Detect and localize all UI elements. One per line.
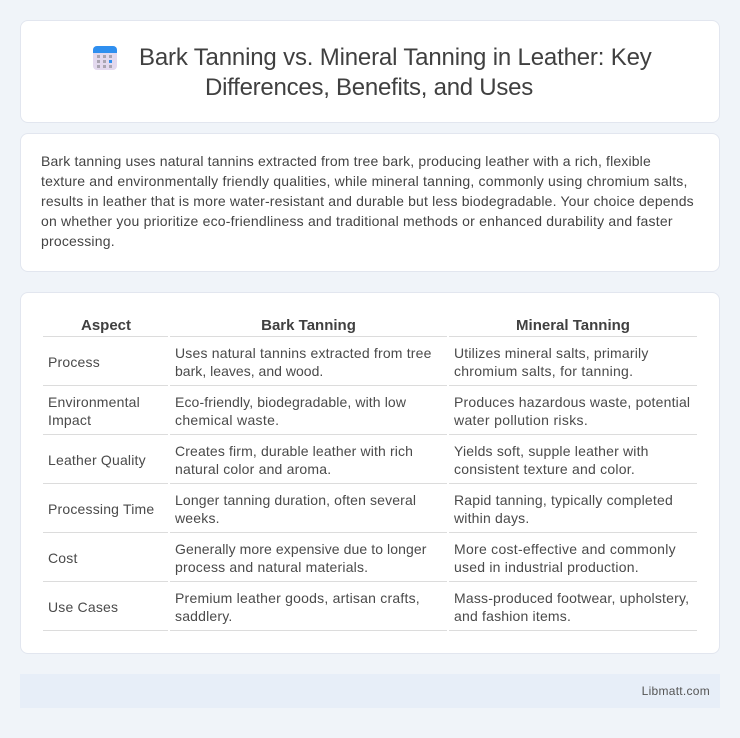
text block: intro paragraph: texture and environmentally friendly qualities, while mineral tanning, commonly using chromium salts,	[41, 173, 688, 189]
panel: intro card	[20, 133, 720, 272]
heading: title: Bark Tanning vs. Mineral Tanning in Leather: Key	[139, 44, 652, 71]
row: Environmental Impact: Eco-friendly, biodegradable, with low	[175, 394, 406, 410]
row: Process: Process	[48, 354, 100, 370]
icon: calendar	[93, 46, 117, 70]
row: Leather Quality: Yields soft, supple leather with	[454, 443, 649, 459]
row: Process: bark, leaves, and wood.	[175, 363, 323, 379]
row: Use Cases: Use Cases	[48, 599, 118, 615]
row: Leather Quality: Creates firm, durable leather with rich	[175, 443, 413, 459]
row: Processing Time: Processing Time	[48, 501, 154, 517]
text block: intro paragraph: results in leather that is more water-resistant and durable but less biodegradable. Your choice depends	[41, 193, 694, 209]
row: Use Cases: saddlery.	[175, 608, 232, 624]
table header: Aspect	[81, 317, 131, 334]
table: comparison	[43, 317, 697, 631]
row: Processing Time	[48, 492, 673, 526]
panel: comparison table card	[20, 292, 720, 654]
row: Environmental Impact	[48, 394, 690, 428]
row: Cost: process and natural materials.	[175, 559, 368, 575]
heading: title: Differences, Benefits, and Uses	[205, 74, 533, 101]
row: Process: chromium salts, for tanning.	[454, 363, 633, 379]
footer: source bar	[20, 674, 720, 708]
row: Environmental Impact: Impact	[48, 412, 91, 428]
row: Use Cases: Mass-produced footwear, upholstery,	[454, 590, 689, 606]
row: Use Cases: Premium leather goods, artisan crafts,	[175, 590, 420, 606]
row: Process	[48, 345, 649, 379]
panel: title card	[20, 20, 720, 123]
row: Leather Quality: Leather Quality	[48, 452, 146, 468]
row: Process: Utilizes mineral salts, primarily	[454, 345, 649, 361]
row: Processing Time: Rapid tanning, typically completed	[454, 492, 673, 508]
row: Cost: More cost-effective and commonly	[454, 541, 676, 557]
row: Leather Quality: natural color and aroma.	[175, 461, 331, 477]
row: Cost: used in industrial production.	[454, 559, 639, 575]
table header	[81, 317, 630, 334]
row: Leather Quality	[48, 443, 649, 477]
text block: intro paragraph: on whether you prioritize eco-friendliness and traditional methods or enhanced durability and faster	[41, 213, 673, 229]
row: Leather Quality: consistent texture and color.	[454, 461, 635, 477]
text block: intro paragraph: Bark tanning uses natural tannins extracted from tree bark, producing leather with a rich, flexible	[41, 153, 651, 169]
table header: Bark Tanning	[261, 317, 356, 334]
row: Cost	[48, 541, 676, 575]
heading: title	[139, 44, 652, 101]
row: Environmental Impact: Produces hazardous waste, potential	[454, 394, 690, 410]
row: Cost: Cost	[48, 550, 78, 566]
footer text: Libmatt.com	[642, 684, 710, 698]
row: Environmental Impact: chemical waste.	[175, 412, 279, 428]
row: Processing Time: Longer tanning duration, often several	[175, 492, 416, 508]
text block: intro paragraph	[41, 153, 694, 249]
row: Use Cases: and fashion items.	[454, 608, 571, 624]
row: Environmental Impact: water pollution risks.	[454, 412, 588, 428]
row: Processing Time: within days.	[454, 510, 529, 526]
row: Environmental Impact: Environmental	[48, 394, 140, 410]
row: Use Cases	[48, 590, 689, 624]
text block: intro paragraph: processing.	[41, 233, 115, 249]
row: Cost: Generally more expensive due to longer	[175, 541, 426, 557]
row: Processing Time: weeks.	[175, 510, 220, 526]
row: Process: Uses natural tannins extracted from tree	[175, 345, 432, 361]
table header: Mineral Tanning	[516, 317, 630, 334]
